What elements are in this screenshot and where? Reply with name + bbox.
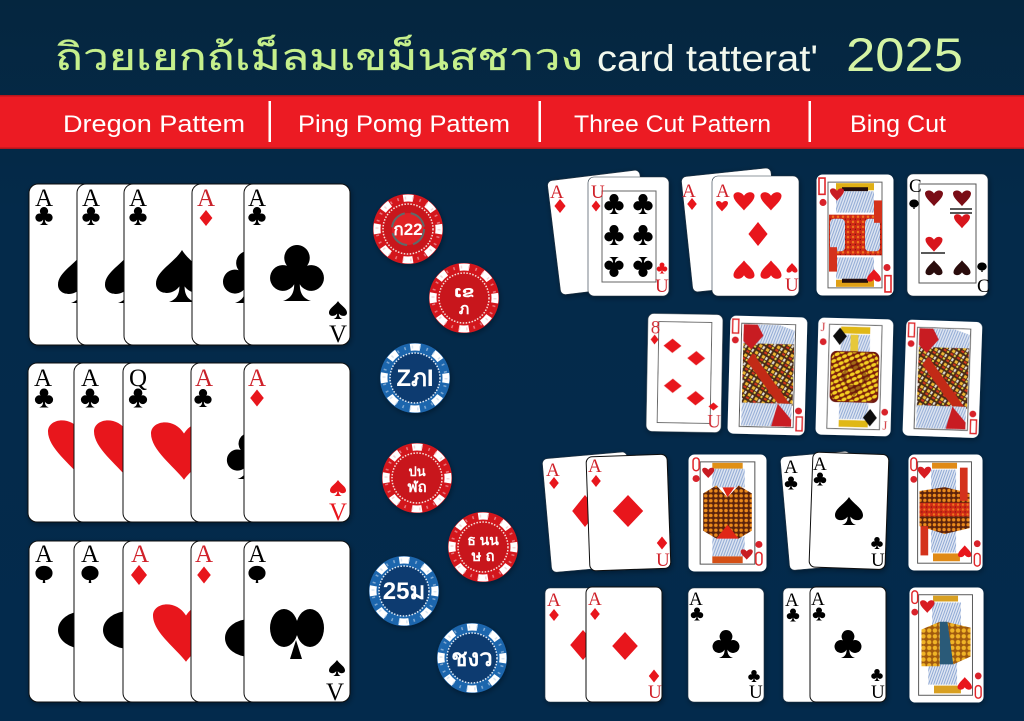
right row 3: ace of spades fan — [780, 451, 889, 571]
right row 3: ace of diamonds fan: U — [656, 550, 670, 571]
left card row 2: hearts: A — [195, 365, 213, 392]
right row 4: ace of clubs fan: A — [785, 590, 799, 611]
poker chip: red 1 — [373, 194, 443, 264]
right row 3: ace of spades fan: U — [871, 550, 885, 571]
left card row 1: Dragon pattern: A — [129, 185, 147, 212]
red tab bar: Bing Cut — [850, 111, 946, 138]
right row 1: ace fan with six of clubs — [547, 170, 669, 297]
right row 4: ace of diamonds fan: A — [588, 589, 602, 610]
poker chip: blue 1: ZภI — [396, 365, 434, 392]
right row 4: yellow face card — [909, 587, 984, 703]
poker chip: red 1: ก22 — [393, 220, 423, 239]
right row 1: ace fan with six of clubs: U — [591, 182, 605, 203]
left card row 3: mixed: A — [35, 541, 53, 568]
title: card tatterat' — [597, 38, 818, 79]
face card: mosaic 1 — [727, 316, 807, 435]
poker chip: blue 3 — [437, 623, 507, 693]
right row 2: four of diamonds: U — [707, 411, 721, 433]
right row 1: face card — [816, 175, 894, 295]
right row 4: ace of diamonds fan: U — [648, 682, 662, 703]
right row 2: four of diamonds: 8 — [651, 317, 660, 339]
title: ถิวยเยกถ้เม็ลมเขม็นสชาวง — [55, 34, 583, 79]
red tab bar — [0, 95, 1024, 149]
title: 2025 — [846, 28, 963, 81]
left card row 2: hearts: A — [81, 365, 99, 392]
right row 4: ace of clubs: A — [689, 589, 703, 610]
right row 3: ace of diamonds fan — [542, 452, 671, 573]
poker chip: red 4: ธ นน — [467, 532, 499, 548]
left card row 2: hearts: A — [248, 365, 266, 392]
red tab bar: Ping Pomg Pattem — [298, 111, 510, 138]
poker chip: red 4 — [448, 512, 518, 582]
left card row 2: hearts: V — [329, 499, 347, 526]
left card row 1: Dragon pattern: A — [197, 185, 215, 212]
right row 4: ace of clubs: U — [749, 682, 763, 703]
right row 1: heart pip card — [907, 174, 990, 297]
right row 3: ace of diamonds fan: A — [546, 460, 560, 481]
left card row 3: mixed: A — [195, 541, 213, 568]
poker chip: blue 3: ชงว — [451, 645, 493, 672]
red tab bar: Dregon Pattem — [63, 111, 245, 138]
poker chip: blue 2: 25ม — [383, 578, 425, 605]
right row 4: ace of clubs fan: A — [811, 589, 825, 610]
right row 1: heart pip card: C — [909, 176, 922, 197]
face card: mosaic 2 — [902, 320, 982, 438]
title — [55, 28, 963, 81]
left card row 1: Dragon pattern: V — [329, 321, 347, 348]
left card row 3: mixed — [29, 541, 350, 706]
right row 3: orange face card — [689, 454, 766, 572]
right row 2: face cards — [727, 316, 982, 438]
left card row 3: mixed: A — [248, 541, 266, 568]
face card: yellow — [815, 318, 893, 436]
poker chip: blue 1 — [380, 343, 450, 413]
right row 3: ace of spades fan: A — [784, 457, 798, 478]
poker chip: red 2: ภ — [459, 301, 469, 318]
left card row 2: hearts — [28, 363, 350, 526]
left card row 1: Dragon pattern — [29, 184, 350, 348]
poker chip: red 3: ฬถ — [407, 479, 427, 496]
right row 3: ace of spades fan: A — [813, 454, 827, 475]
left card row 1: Dragon pattern: A — [82, 185, 100, 212]
poker chip: red 4: ษ ถ — [470, 548, 495, 565]
poker chip: red 3 — [382, 443, 452, 513]
left card row 1: Dragon pattern: A — [248, 185, 266, 212]
right row 1: ace fan with six of clubs: U — [655, 276, 669, 297]
right row 1: heart pip card: C — [977, 276, 990, 297]
right row 2: four of diamonds — [646, 313, 723, 433]
right row 1: ace fan with hearts: A — [682, 181, 696, 202]
poker chip: red 2 — [429, 263, 499, 333]
left card row 1: Dragon pattern: A — [35, 185, 53, 212]
poker chip: blue 2 — [369, 556, 439, 626]
right row 4: ace of clubs — [688, 588, 764, 703]
right row 1: ace fan with six of clubs: A — [550, 182, 564, 203]
left card row 2: hearts: Q — [129, 365, 147, 392]
left card row 2: hearts: A — [34, 365, 52, 392]
red tab bar: Three Cut Pattern — [574, 111, 771, 138]
left card row 3: mixed: V — [326, 679, 344, 706]
right row 1: ace fan with hearts — [681, 168, 799, 296]
right row 4: ace of clubs fan — [783, 587, 886, 703]
right row 1: ace fan with hearts: U — [785, 275, 799, 296]
right row 3: ace of diamonds fan: A — [588, 456, 602, 477]
left card row 3: mixed: A — [131, 541, 149, 568]
poker chip: red 3: ปน — [408, 464, 426, 479]
poker chip: red 2: ເຂ — [454, 284, 474, 301]
right row 4: ace of clubs fan: U — [871, 682, 885, 703]
right row 3: knave face card — [908, 454, 983, 571]
right row 1: ace fan with hearts: A — [716, 181, 730, 202]
right row 4: ace of diamonds fan — [545, 587, 662, 703]
left card row 3: mixed: A — [81, 541, 99, 568]
right row 4: ace of diamonds fan: A — [547, 590, 561, 611]
